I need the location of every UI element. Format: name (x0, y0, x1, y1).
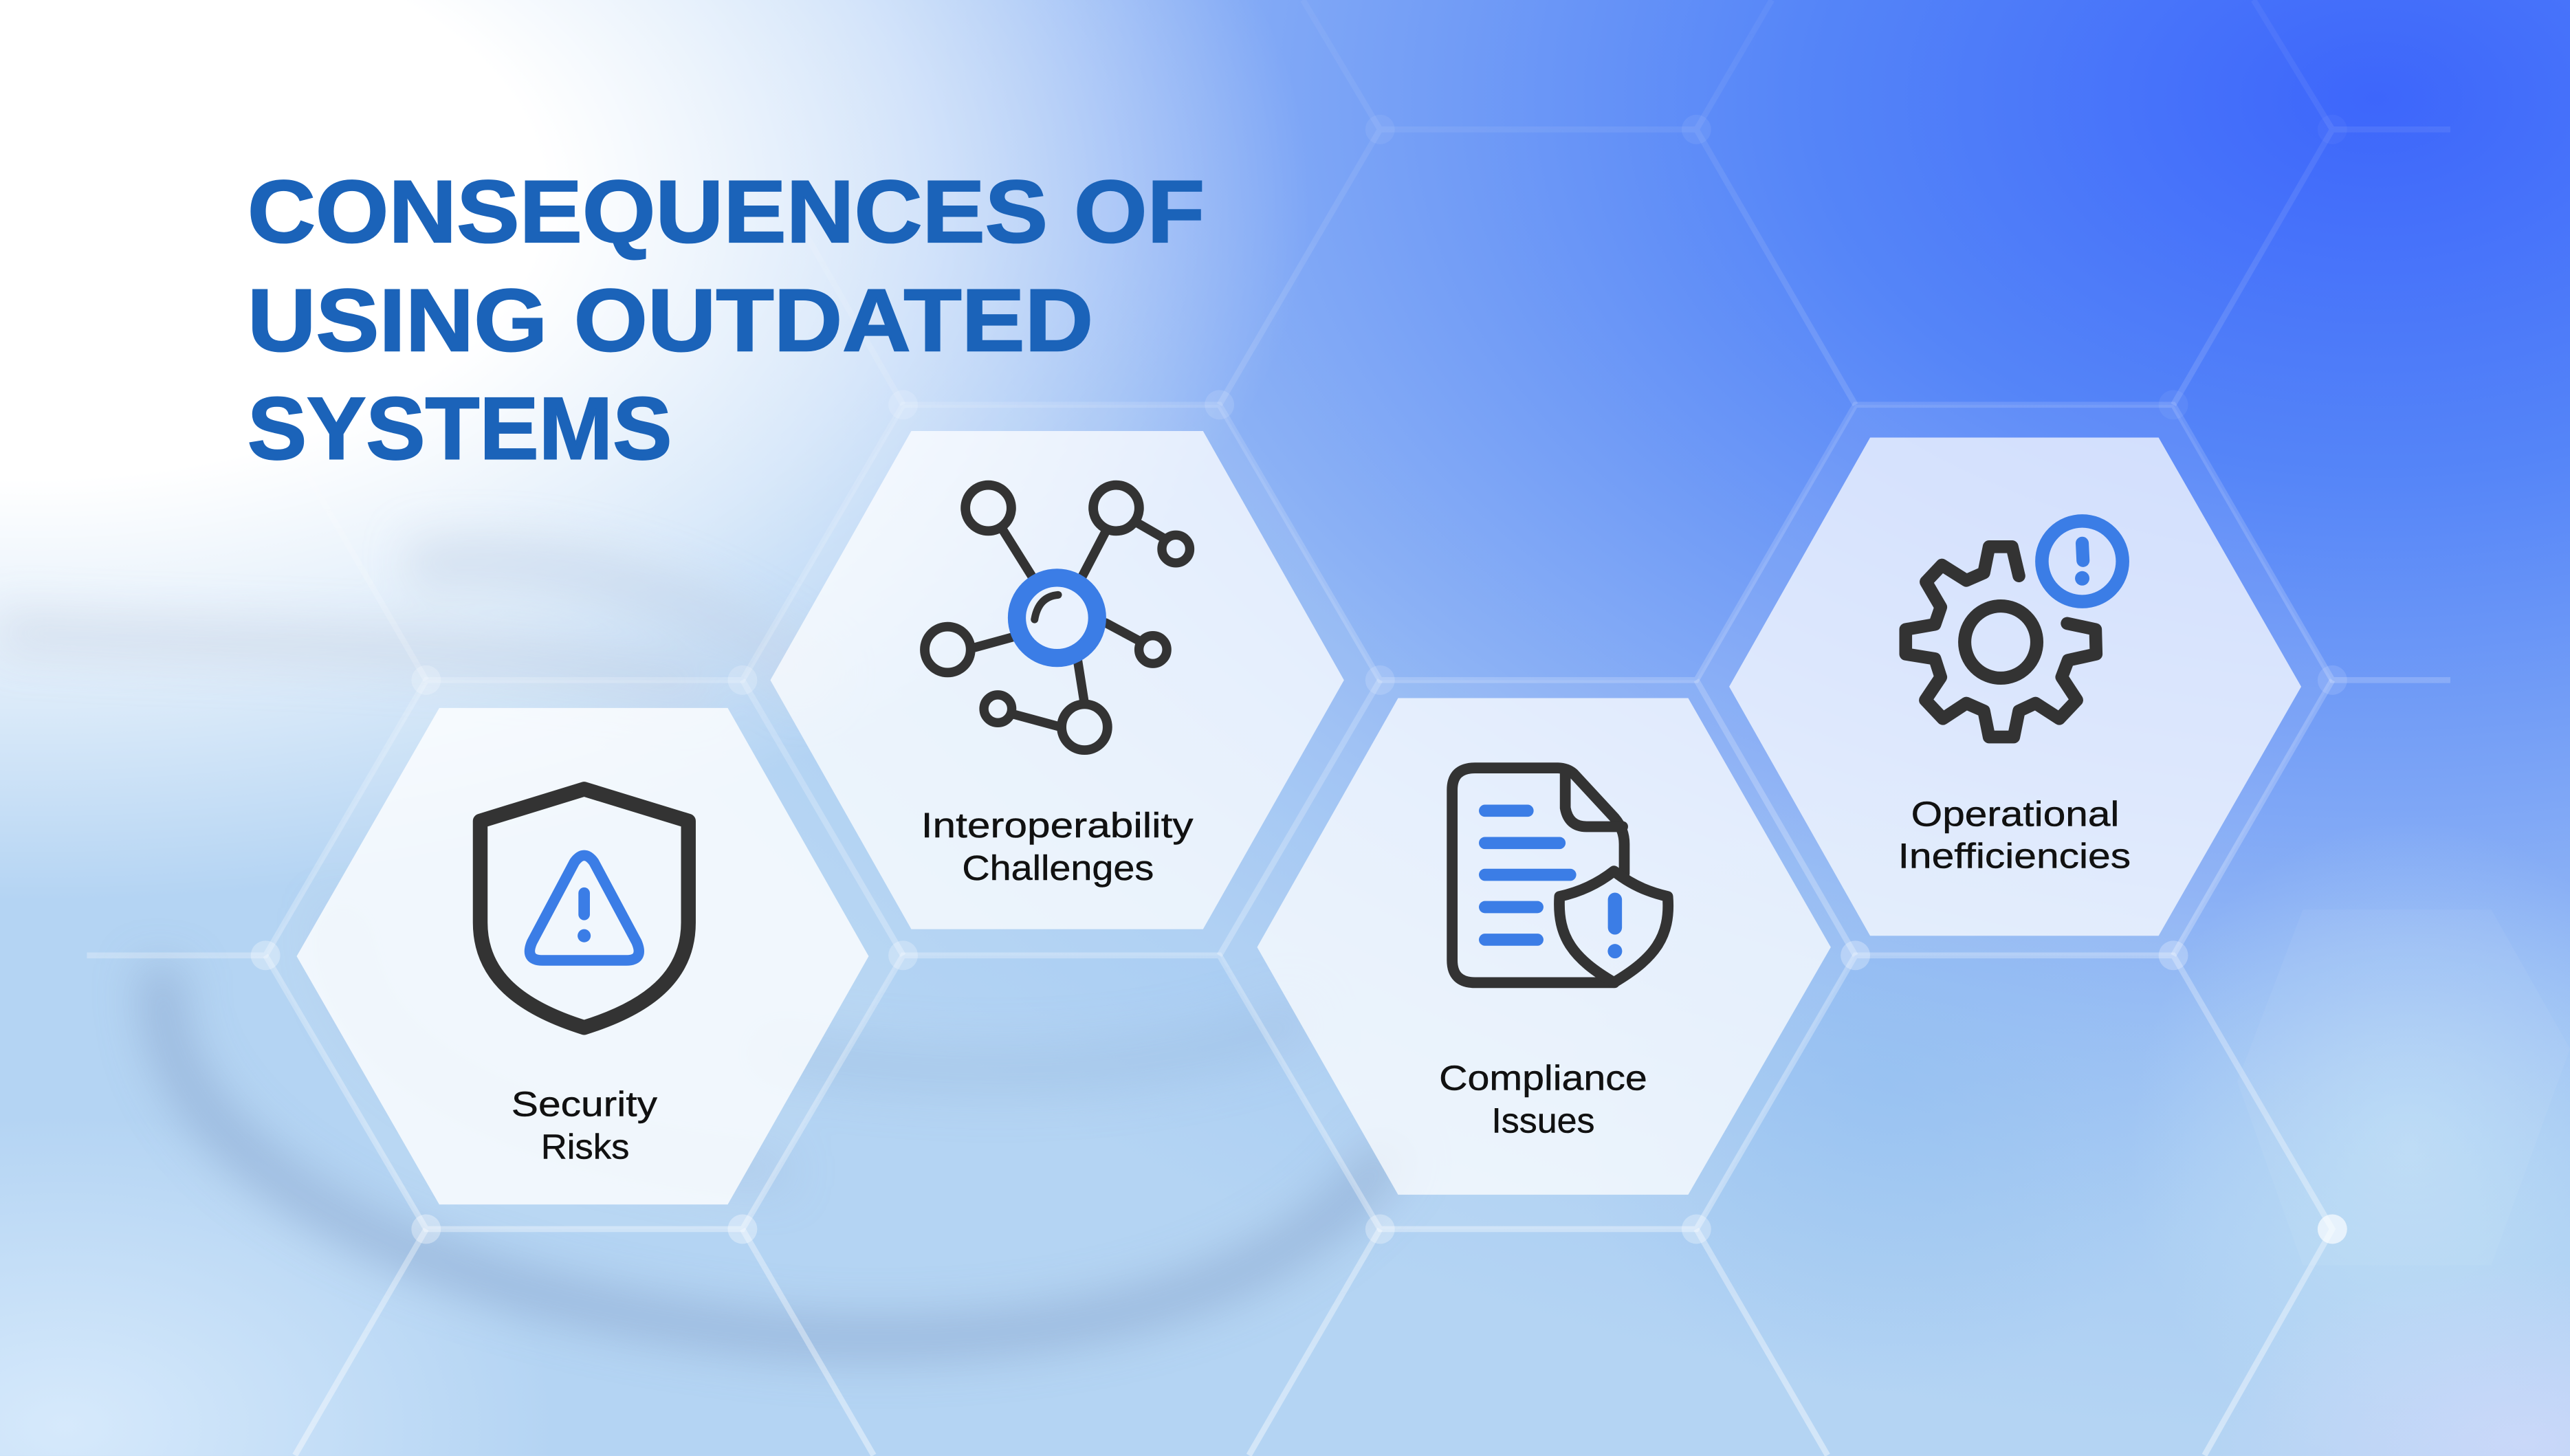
label: interoperability challenges: Challenges (962, 848, 1154, 887)
title: CONSEQUENCES OF (248, 162, 1205, 261)
icon: gear with alert (1906, 521, 2122, 737)
label: interoperability challenges: Interoperability (921, 806, 1194, 845)
panel: interoperability challenges (770, 431, 1344, 929)
label: compliance issues: Issues (1491, 1101, 1595, 1140)
label: compliance issues (1439, 1058, 1647, 1140)
panel: operational inefficiencies (1729, 438, 2301, 936)
title (248, 162, 1205, 478)
title: SYSTEMS (248, 379, 672, 478)
icon: document with shield (1452, 768, 1668, 982)
label: compliance issues: Compliance (1439, 1058, 1647, 1097)
title: USING OUTDATED (248, 271, 1093, 370)
label: operational inefficiencies: Operational (1911, 794, 2119, 833)
label: interoperability challenges (921, 806, 1194, 887)
label: security risks: Risks (541, 1127, 629, 1166)
panel: compliance issues (1257, 698, 1831, 1195)
icon: network nodes (925, 485, 1189, 750)
label: operational inefficiencies: Inefficiencies (1898, 836, 2131, 875)
label: operational inefficiencies (1898, 794, 2131, 875)
label: security risks (512, 1084, 657, 1166)
icon: shield with warning triangle (480, 789, 688, 1028)
panel: security risks (296, 708, 868, 1204)
label: security risks: Security (512, 1084, 657, 1123)
